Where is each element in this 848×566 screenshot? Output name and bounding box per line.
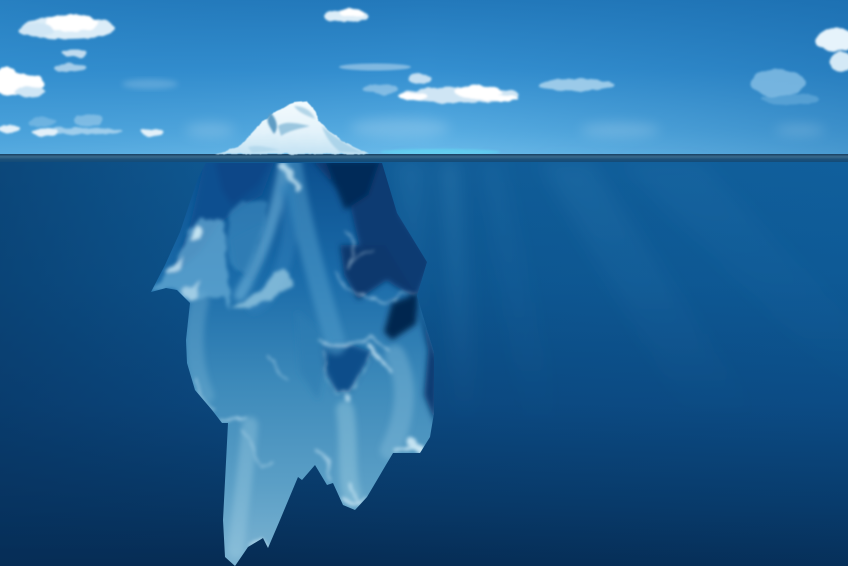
pale left ice bbox=[152, 200, 292, 310]
iceberg: tip above water bbox=[216, 101, 369, 154]
central pale flow bbox=[195, 165, 404, 550]
cloud: centre band bbox=[362, 74, 520, 103]
horizon glow bbox=[380, 149, 500, 155]
tip shading bbox=[248, 106, 364, 153]
ocean bbox=[0, 160, 848, 566]
cloud: left bright bbox=[0, 67, 46, 97]
cloud: top centre bbox=[323, 8, 369, 22]
light rays bbox=[395, 162, 848, 430]
cloud: faint left bbox=[122, 79, 178, 89]
clouds bbox=[0, 8, 848, 138]
iceberg: submerged mass bbox=[151, 160, 438, 566]
cloud: right of centre bbox=[538, 79, 614, 91]
cloud: faint horizon wisps bbox=[185, 118, 825, 138]
cloud: small under top left bbox=[54, 49, 87, 72]
cloud: upper right bbox=[751, 69, 820, 104]
waterline band bbox=[0, 154, 848, 162]
cloud: top left large bbox=[18, 14, 116, 39]
soft highlights bbox=[195, 165, 420, 546]
cloud: left low bbox=[0, 114, 164, 136]
sky background bbox=[0, 0, 848, 155]
cloud: thin centre bbox=[339, 64, 411, 70]
cloud: right edge bbox=[816, 29, 848, 72]
dark upper faces bbox=[170, 160, 438, 425]
